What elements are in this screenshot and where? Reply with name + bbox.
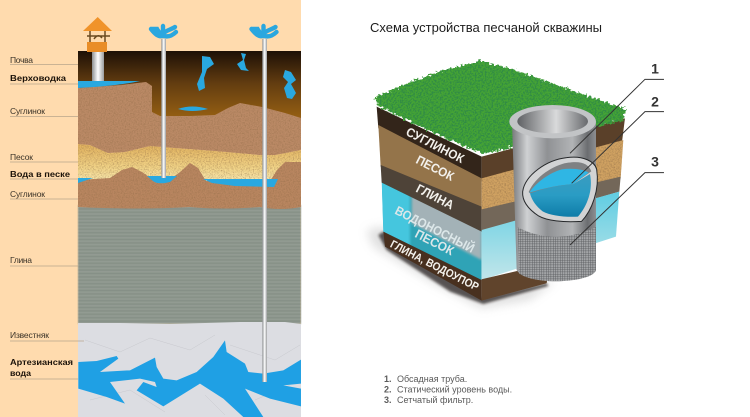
water body xyxy=(530,174,591,217)
fountain left xyxy=(151,26,176,36)
mesh filter xyxy=(518,227,596,281)
sand layer xyxy=(78,144,301,185)
left face: sand xyxy=(378,125,482,209)
upper loam layer xyxy=(78,82,301,155)
soft ground shadow xyxy=(367,227,557,308)
legend list xyxy=(384,374,512,405)
right face: aquifer xyxy=(482,192,619,280)
legend item 1: Обсадная труба. xyxy=(397,374,467,384)
pipe body xyxy=(512,122,596,280)
cutaway rim xyxy=(523,157,597,222)
fountain right xyxy=(252,26,276,36)
water well xyxy=(83,17,112,81)
left face: bottom clay xyxy=(383,232,482,301)
legend item 3: 3. xyxy=(384,395,392,405)
labels: Суглинок xyxy=(10,106,45,116)
pipe top rim xyxy=(509,105,596,138)
well roof xyxy=(83,17,112,31)
legend item 3: Сетчатый фильтр. xyxy=(397,395,473,405)
water surface xyxy=(529,169,589,193)
dark ground edge xyxy=(378,232,548,304)
labels xyxy=(10,55,73,378)
leader numbers: 3 xyxy=(651,154,659,170)
lower loam layer xyxy=(78,162,301,209)
leader numbers xyxy=(651,60,659,170)
pipe inner wall xyxy=(517,109,588,133)
right face: sand xyxy=(482,140,623,210)
labels: Песок xyxy=(10,152,33,162)
layer names: ГЛИНА xyxy=(414,182,456,212)
grass top xyxy=(375,61,627,154)
left face: loam xyxy=(377,107,482,182)
artesian water xyxy=(78,340,301,417)
labels: Известняк xyxy=(10,330,49,340)
borehole to artesian water xyxy=(262,39,267,382)
water in sand xyxy=(78,176,278,187)
title: Схема устройства песчаной скважины xyxy=(370,20,602,35)
labels: Суглинок xyxy=(10,189,45,199)
layer names: ВОДОНОСНЫЙ xyxy=(393,203,477,256)
label lines xyxy=(10,64,84,379)
well base xyxy=(87,42,107,52)
legend item 2: Статический уровень воды. xyxy=(397,384,512,394)
right face: clay xyxy=(482,177,621,232)
limestone layer xyxy=(78,322,301,417)
water pockets in soil xyxy=(178,53,296,111)
layer names: ГЛИНА, ВОДОУПОР xyxy=(388,239,481,294)
labels: Вода в песке xyxy=(10,169,70,179)
well shaft xyxy=(92,52,104,81)
well windlass xyxy=(87,31,110,42)
left face: clay xyxy=(381,165,482,232)
labels: Верховодка xyxy=(10,73,66,83)
layer names: ПЕСОК xyxy=(414,153,456,184)
labels: вода xyxy=(10,368,31,378)
layer names xyxy=(388,125,481,294)
labels: Почва xyxy=(10,55,33,65)
perched water xyxy=(78,81,140,88)
legend item 1: 1. xyxy=(384,374,392,384)
labels: Глина xyxy=(10,255,32,265)
legend item 2: 2. xyxy=(384,384,392,394)
panel: geological cross-section xyxy=(0,0,301,417)
right face: soil xyxy=(482,118,625,181)
clay layer xyxy=(78,205,301,324)
layer names: ПЕСОК xyxy=(413,227,456,258)
leader lines xyxy=(570,79,664,245)
leader numbers: 1 xyxy=(651,60,659,76)
left face: aquifer sand xyxy=(378,177,482,282)
right face: bottom xyxy=(482,263,550,301)
labels: Артезианская xyxy=(10,357,73,367)
aquifer bright left part xyxy=(382,181,411,245)
limestone cracks xyxy=(85,335,300,415)
casing pipe xyxy=(509,105,597,281)
borehole to sand xyxy=(161,39,166,178)
layer names: СУГЛИНОК xyxy=(404,125,467,166)
cutaway back wall xyxy=(529,162,591,193)
soil layer xyxy=(78,51,301,131)
illustration: sand well block xyxy=(367,60,664,308)
aquifer grey band xyxy=(412,192,482,260)
leader numbers: 2 xyxy=(651,94,659,110)
